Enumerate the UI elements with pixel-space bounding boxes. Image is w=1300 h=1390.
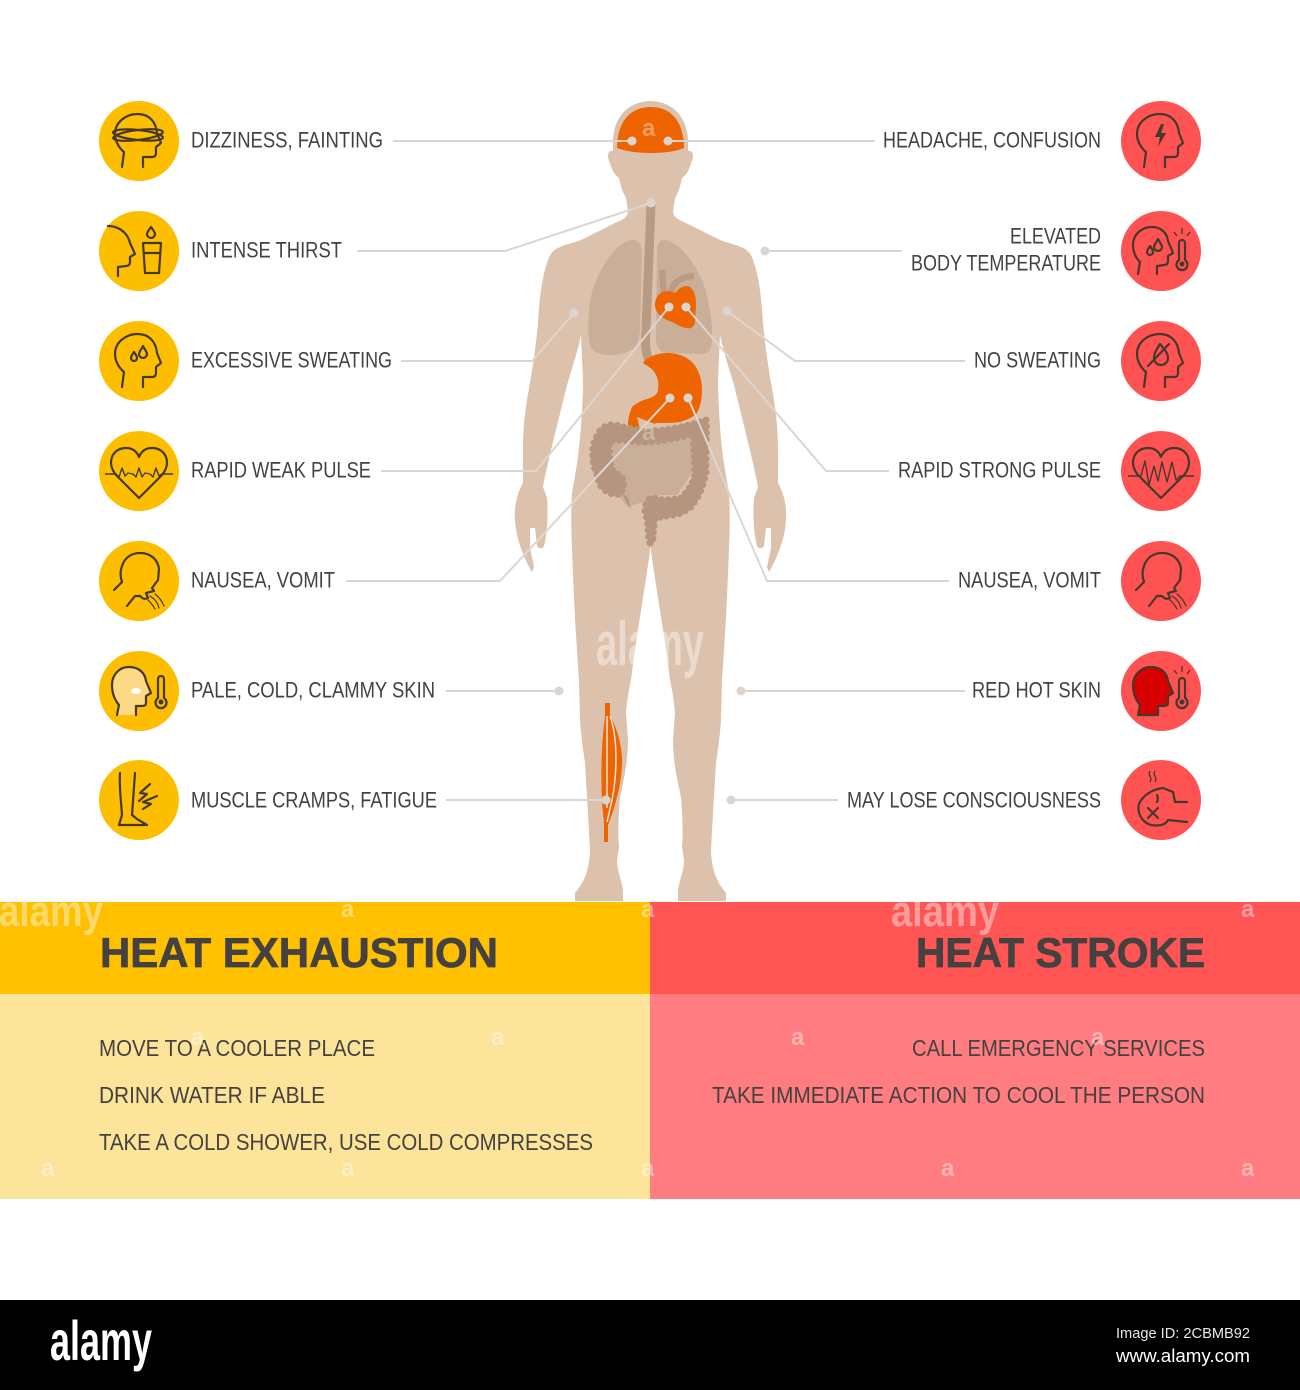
- watermarks: alamy: [596, 610, 704, 679]
- label: rapid weak pulse: RAPID WEAK PULSE: [191, 458, 371, 482]
- calf muscle: [601, 703, 622, 842]
- footer logo: alamy: [50, 1309, 152, 1372]
- advice list: heat stroke: CALL EMERGENCY SERVICES: [912, 1035, 1205, 1061]
- watermarks: a: [1241, 1155, 1255, 1182]
- label: elevated body temperature: ELEVATED: [1010, 224, 1101, 248]
- advice list: heat stroke: TAKE IMMEDIATE ACTION TO COOL THE PERSON: [712, 1082, 1205, 1108]
- icon: pale skin head and thermometer: [99, 651, 179, 731]
- watermarks: alamy: [891, 887, 999, 936]
- icon: high temperature head: [1121, 211, 1201, 291]
- footer url: www.alamy.com: [1115, 1346, 1250, 1366]
- lungs: [588, 240, 712, 355]
- watermarks: a: [1091, 1024, 1105, 1051]
- icon: lying unconscious head: [1121, 760, 1201, 840]
- icon: weak pulse heart: [99, 431, 179, 511]
- label: elevated body temperature: [911, 224, 1101, 276]
- label: excessive sweating: EXCESSIVE SWEATING: [191, 348, 392, 372]
- body silhouette: [515, 101, 786, 901]
- heat stroke body panel: [650, 994, 1300, 1199]
- esophagus: [645, 204, 651, 362]
- heat exhaustion body panel: [0, 994, 650, 1199]
- watermarks: a: [641, 1155, 655, 1182]
- watermarks: a: [191, 1024, 205, 1051]
- icon: excessive sweating head: [99, 321, 179, 401]
- stomach: [628, 353, 702, 428]
- footer bar: [0, 1300, 1300, 1390]
- heading: heat stroke: HEAT STROKE: [916, 929, 1205, 976]
- watermarks: a: [941, 1155, 955, 1182]
- icon: no sweating head: [1121, 321, 1201, 401]
- human body figure: [515, 101, 786, 901]
- heading: heat exhaustion: HEAT EXHAUSTION: [100, 929, 498, 976]
- label: nausea, vomit: NAUSEA, VOMIT: [191, 568, 335, 592]
- label: pale, cold, clammy skin: PALE, COLD, CLAMMY SKIN: [191, 678, 435, 702]
- advice list: heat exhaustion: TAKE A COLD SHOWER, USE COLD COMPRESSES: [99, 1129, 593, 1155]
- label: headache, confusion: HEADACHE, CONFUSION: [883, 128, 1101, 152]
- label: rapid strong pulse: RAPID STRONG PULSE: [898, 458, 1101, 482]
- panel: heat stroke: [650, 902, 1300, 1199]
- watermarks: alamy: [0, 887, 103, 936]
- intestines: [593, 417, 706, 543]
- label: red hot skin: RED HOT SKIN: [972, 678, 1101, 702]
- heat exhaustion header band: [0, 902, 650, 994]
- icon: leg with cramp bolts: [99, 760, 179, 840]
- heat stroke header band: [650, 902, 1300, 994]
- watermarks: a: [1241, 896, 1255, 923]
- watermarks: a: [341, 1155, 355, 1182]
- watermarks: a: [491, 1024, 505, 1051]
- connector lines and dots: [346, 136, 965, 804]
- label: dizziness, fainting: DIZZINESS, FAINTING: [191, 128, 383, 152]
- label: nausea, vomit (heat stroke): NAUSEA, VOMIT: [958, 568, 1101, 592]
- label: muscle cramps, fatigue: MUSCLE CRAMPS, FATIGUE: [191, 788, 437, 812]
- icon: nausea head (heat stroke): [1121, 541, 1201, 621]
- icon: red hot head and thermometer: [1121, 651, 1201, 731]
- label: intense thirst: INTENSE THIRST: [191, 238, 342, 262]
- watermarks: a: [641, 896, 655, 923]
- advice list: heat exhaustion: [99, 1035, 593, 1155]
- watermarks: a: [791, 1024, 805, 1051]
- heart: [655, 270, 696, 328]
- footer image id: Image ID: 2CBMB92: [1116, 1325, 1250, 1342]
- watermarks: a: [41, 1155, 55, 1182]
- advice list: heat exhaustion: DRINK WATER IF ABLE: [99, 1082, 325, 1108]
- brain: [617, 107, 684, 153]
- advice list: heat stroke: [712, 1035, 1205, 1108]
- label: may lose consciousness: MAY LOSE CONSCIOUSNESS: [847, 788, 1101, 812]
- panel: heat exhaustion: [0, 902, 650, 1199]
- label: no sweating: NO SWEATING: [974, 348, 1101, 372]
- watermarks: a: [642, 419, 656, 446]
- icon: dizziness head: [99, 101, 179, 181]
- label: elevated body temperature: BODY TEMPERATURE: [911, 250, 1101, 276]
- icon: thirst head and glass: [99, 211, 179, 291]
- icon: headache head with bolt: [1121, 101, 1201, 181]
- watermarks: a: [341, 896, 355, 923]
- icon: strong pulse heart: [1121, 431, 1201, 511]
- icon: nausea head: [99, 541, 179, 621]
- advice list: heat exhaustion: MOVE TO A COOLER PLACE: [99, 1035, 375, 1061]
- watermarks: a: [642, 115, 656, 142]
- watermarks: [0, 115, 1255, 1182]
